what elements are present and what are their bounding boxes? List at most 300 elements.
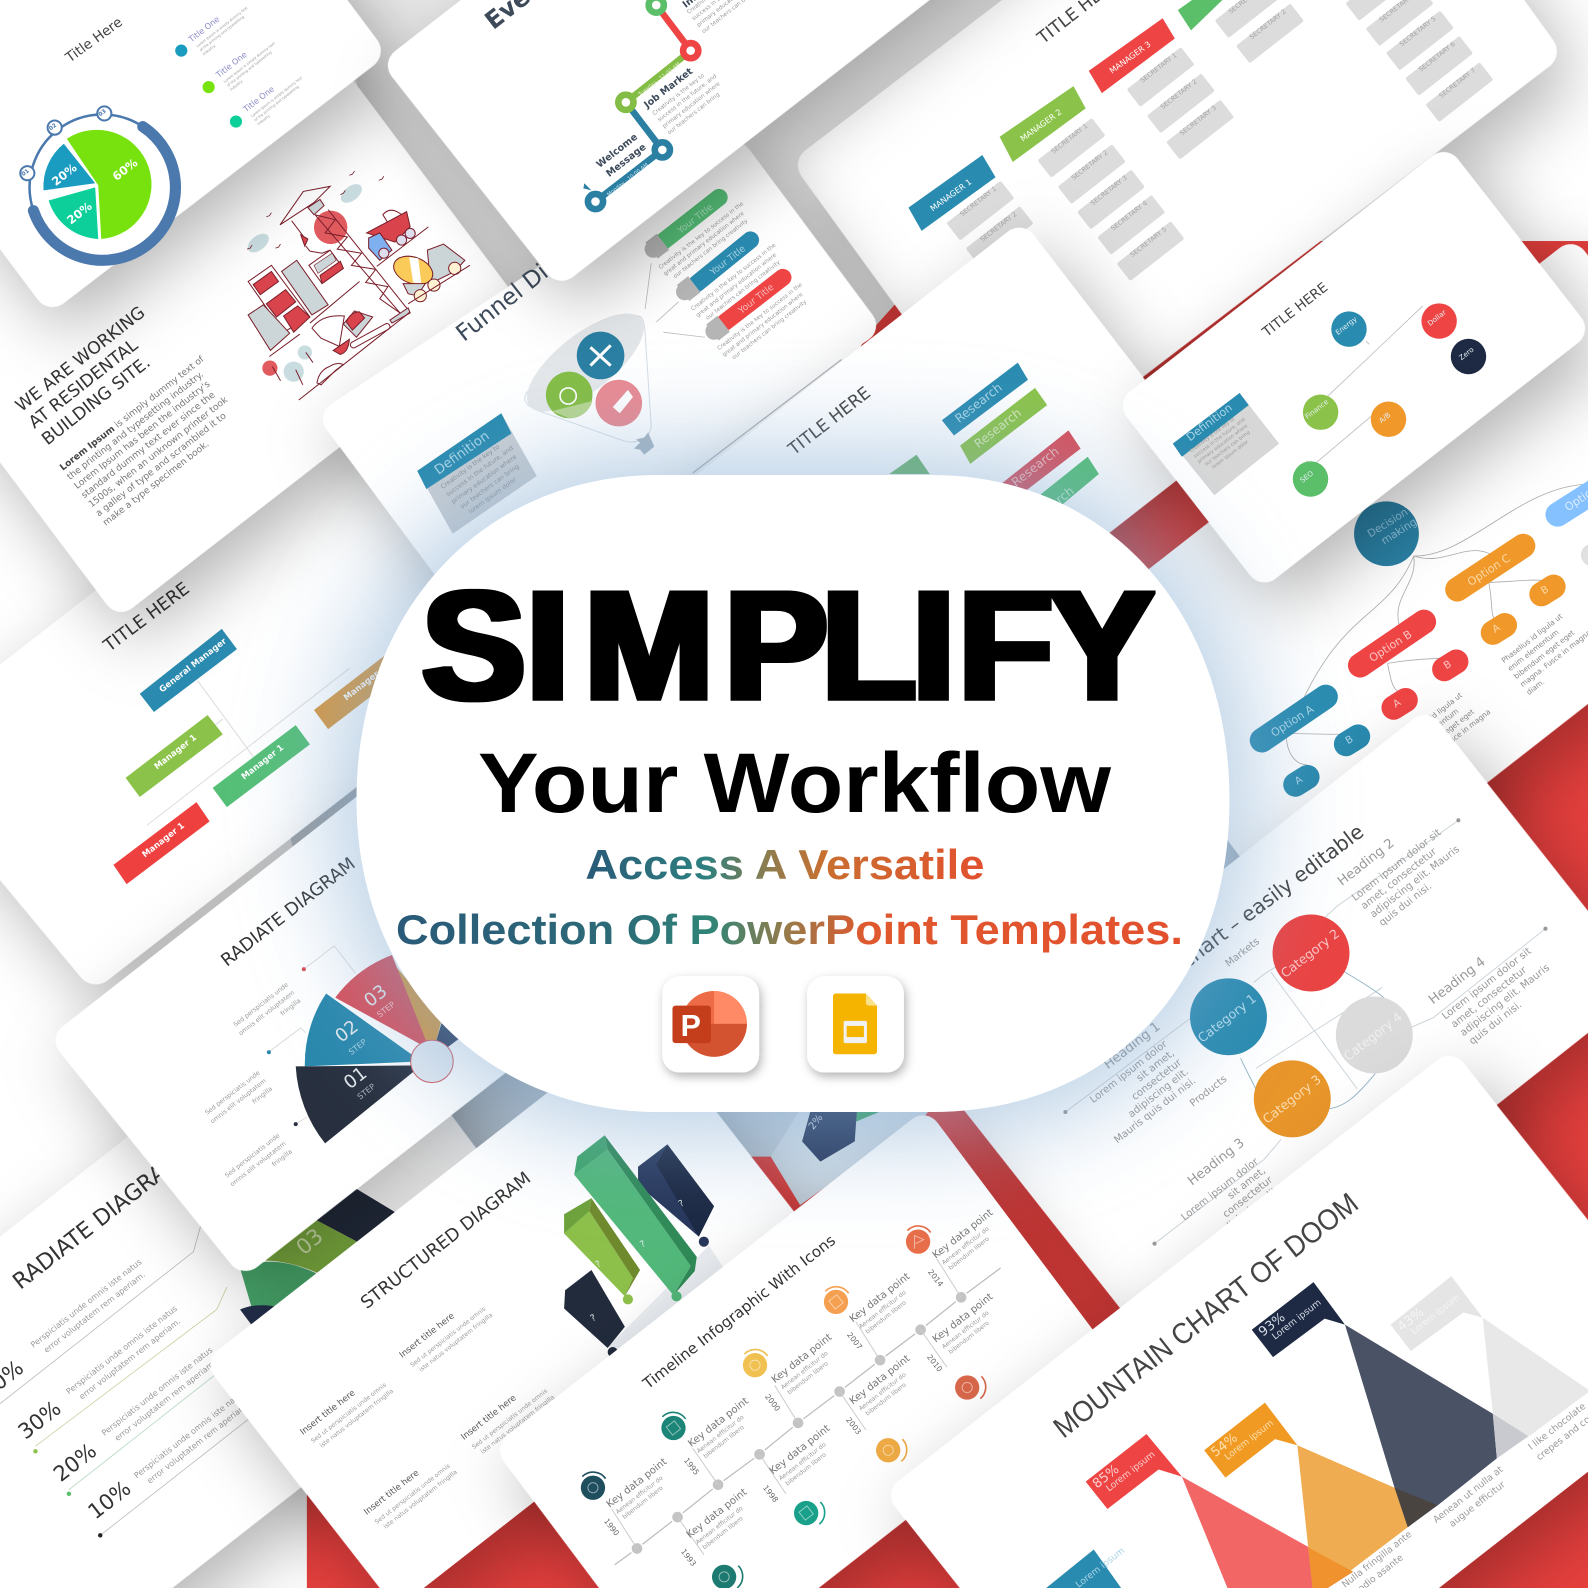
step labels: 01 (21, 168, 31, 178)
green arc chart (240, 1187, 402, 1337)
definition box: Definition (432, 429, 492, 478)
text blocks: Sed ut perspiciatis unde omnis (471, 1388, 549, 1451)
option B: A (1391, 697, 1403, 710)
legend: industry. (202, 44, 217, 56)
category 2: Category 2 (1278, 926, 1342, 981)
leader dots (267, 967, 306, 1126)
definition box (1173, 393, 1279, 495)
key data descriptions: Aenean efficitur do (858, 1371, 908, 1412)
heading bodies (1084, 825, 1559, 1251)
label 43: 43% (1395, 1305, 1427, 1335)
pill descriptions: great and primary education where (722, 292, 805, 358)
title: Timeline Infographic With Icons (639, 1231, 839, 1393)
route line (588, 0, 698, 209)
definition box: Creativity is the key to (440, 443, 501, 491)
years: 2010 (925, 1353, 944, 1374)
heading bodies: consectetur (1130, 1057, 1185, 1103)
decision circle: Decision (1365, 505, 1410, 540)
key data descriptions: bibendum libero (947, 1320, 991, 1356)
dark block (564, 1270, 625, 1357)
title: STRUCTURED DIAGRAM (357, 1169, 535, 1313)
slide: timeline with icons (493, 1108, 1114, 1588)
manager chip lime: Manager 1 (153, 733, 199, 772)
path line (615, 1268, 1001, 1565)
heading: AT RESIDENTAL (25, 335, 142, 433)
legend: of the printing and typesetting (226, 50, 272, 88)
years: 1995 (682, 1456, 701, 1477)
text blocks: Sed ut perspiciatis unde omnis (310, 1382, 388, 1445)
percentages: 60% (110, 155, 141, 184)
slide: decision making (1070, 237, 1588, 932)
years: 2007 (845, 1331, 864, 1351)
secretary labels: SECRETARY 3 (1178, 104, 1218, 137)
key data labels: Key data point (848, 1353, 912, 1407)
grey underlayer top centre (344, 0, 1013, 506)
matrix lines (1065, 820, 1545, 1244)
heading bodies: Lorem ipsum dolor (1088, 1038, 1170, 1106)
illustration: construction site (244, 171, 470, 400)
legend: industry. (257, 113, 271, 126)
pill descriptions: Creativity is the key to success in the (690, 242, 778, 312)
key data labels: Key data point (931, 1291, 995, 1345)
key data descriptions (615, 1225, 996, 1552)
end dots (1063, 818, 1547, 1246)
pill: red title: Your Title (736, 282, 776, 317)
paragraph: Lorem Ipsum has been the industry's (73, 379, 213, 492)
text blocks: Insert title here (460, 1393, 518, 1443)
secretary labels: SECRETARY 5 (1398, 15, 1438, 48)
footer captions: augue efficitur (1447, 1479, 1508, 1530)
step labels (21, 108, 108, 178)
row descriptions: Perspiciatis unde omnis iste natus (99, 1345, 214, 1438)
option text: enim elementum (1506, 627, 1560, 673)
slide: funnel diagram (316, 134, 883, 610)
icon: cement mixer (390, 244, 470, 304)
slide: radiate diagram percentages (0, 969, 572, 1588)
legend (175, 6, 310, 128)
question marks: ? (589, 1313, 598, 1324)
row descriptions (28, 1257, 254, 1490)
axis labels: Products (1188, 1074, 1229, 1109)
option C: A (1491, 622, 1502, 636)
node labels: Zero (1457, 345, 1475, 362)
step labels: 03 (98, 108, 108, 118)
headings: Heading 4 (1426, 955, 1489, 1008)
key data descriptions: bibendum libero (701, 1515, 745, 1551)
percent values: 20% (49, 1439, 102, 1487)
slide: pie chart (0, 0, 388, 314)
secretary labels: SECRETARY 6 (1417, 40, 1457, 73)
decision circle: making (1379, 515, 1419, 547)
manager chip orange: Manager 1 (342, 664, 388, 703)
subheadline: Your Workflow (478, 736, 1112, 830)
pill descriptions (658, 201, 814, 365)
icon: trees and mound (262, 345, 343, 385)
question marks: ? (639, 1239, 648, 1250)
heading bodies: amet, consectetur (1359, 846, 1440, 912)
grey blue underlayer bottom centre (405, 1013, 871, 1215)
key data descriptions: Aenean efficitur do (780, 1350, 830, 1391)
thick ring (33, 127, 175, 260)
icon: crane (280, 186, 410, 323)
key data descriptions: bibendum libero (621, 1485, 665, 1521)
stop descriptions: success in the future, and (657, 73, 719, 123)
title: Matrix chart – easily editable (1120, 819, 1368, 1015)
legend: Lorem Ipsum is simply dummy text (250, 75, 304, 118)
years (602, 1268, 945, 1568)
headline: SIMPLIFY (422, 559, 1154, 733)
row descriptions: error voluptatem rem aperiam. (77, 1316, 182, 1401)
manager 3 chip: MANAGER 3 (1107, 39, 1153, 76)
step badges (20, 106, 111, 180)
funnel slide lower fill (547, 304, 873, 527)
years: 1993 (679, 1547, 698, 1568)
option C (1457, 546, 1570, 649)
text blocks: Insert title here (398, 1311, 457, 1360)
option text: diam. (1525, 677, 1546, 697)
text blocks: Insert title here (299, 1388, 357, 1437)
row descriptions: error voluptatem rem aperiam. (145, 1400, 250, 1485)
years: 1998 (761, 1483, 780, 1504)
secretary labels: SECRETARY 4 (1109, 199, 1149, 232)
node labels: A/B (1377, 410, 1392, 425)
research green (960, 388, 1047, 464)
slide: mountain chart (884, 1049, 1588, 1588)
key data labels: Key data point (685, 1487, 749, 1541)
definition box: Creativity is the key to (1189, 416, 1236, 454)
definition box: success in the future, and (445, 445, 515, 498)
stop titles: Message (604, 141, 649, 180)
heading: WE ARE WORKING (12, 303, 149, 416)
general manager chip: General Manager (158, 636, 229, 695)
axis labels: Markets (1224, 936, 1262, 970)
option text (1399, 604, 1588, 768)
title: Title Here (62, 14, 126, 67)
heading bodies: sit amet, (1135, 1048, 1177, 1084)
label 54: Lorem ipsum (1223, 1418, 1276, 1463)
icon: tools circle (577, 332, 624, 379)
pill: blue title (676, 240, 750, 301)
option text: enim elementum (1406, 706, 1460, 752)
navy mountain (1345, 1325, 1497, 1527)
heading bodies: Lorem ipsum dolor sit (1350, 827, 1443, 904)
row descriptions: error voluptatem rem aperiam. (42, 1269, 147, 1355)
nodes (631, 1291, 967, 1555)
legend: industry. (229, 79, 244, 92)
title: RADIATE DIAGRAM (8, 1147, 187, 1295)
label 43 (1391, 1276, 1483, 1351)
option B: Option B (1367, 628, 1414, 665)
navy orange overlap (1395, 1488, 1437, 1527)
slide with cube (771, 1094, 942, 1205)
pill: green title: Your Title (675, 202, 716, 237)
label blue (1046, 1546, 1127, 1588)
node labels: Finance (1303, 397, 1330, 421)
route labels (606, 61, 682, 198)
row descriptions: Perspiciatis unde omnis iste natus (28, 1257, 144, 1350)
mountains (1182, 1318, 1588, 1588)
step text (203, 981, 302, 1196)
title: TITLE HERE (784, 383, 875, 460)
slide: structured diagram (203, 1018, 836, 1588)
gray mountain (1483, 1318, 1588, 1458)
heading bodies: quis dui nisi. (1377, 881, 1434, 929)
heading bodies: adipiscing elit. Mauris (1458, 962, 1552, 1039)
step text: Sed perspiciatis unde (232, 981, 290, 1029)
key data labels: Key data point (848, 1271, 912, 1325)
stop titles: Job Market (641, 66, 695, 111)
row descriptions: Perspiciatis unde omnis iste natus (64, 1303, 179, 1396)
step labels (331, 981, 397, 1101)
red mountain (1182, 1477, 1353, 1588)
step labels: 01 (340, 1063, 371, 1094)
connectors (1286, 484, 1588, 765)
icon: target circle (546, 372, 592, 418)
step text: fringilla (251, 1085, 274, 1106)
option text: bibendum eget eget (1412, 707, 1476, 760)
heading bodies: amet, consectetur (1449, 964, 1530, 1031)
percent values: 30% (14, 1396, 66, 1445)
stop descriptions: our teachers can bring (667, 92, 721, 136)
pill descriptions: our teachers can bring creativity (673, 218, 750, 280)
icon: PowerPoint: P (681, 1009, 701, 1043)
heading bodies: sit amet, (1226, 1166, 1268, 1202)
icon: excavator (299, 282, 410, 400)
green bar (574, 1135, 697, 1301)
secretary labels: SECRETARY 1 (1139, 51, 1178, 85)
category 4: Category 4 (1341, 1009, 1405, 1064)
paragraph: Lorem Ipsum is simply dummy text of (58, 355, 206, 473)
icon arcs (582, 1226, 986, 1588)
key data descriptions: bibendum libero (786, 1360, 830, 1396)
category 1: Category 1 (1195, 991, 1259, 1046)
label 93 (1252, 1282, 1345, 1357)
key data descriptions: bibendum libero (702, 1424, 746, 1460)
secretary labels (958, 0, 1477, 259)
key data descriptions: Aenean efficitur do (615, 1474, 665, 1516)
key data descriptions: Aenean efficitur do (941, 1309, 991, 1351)
headings: Heading 1 (1101, 1019, 1163, 1073)
step labels: 02 (331, 1016, 363, 1047)
red orange overlap (1308, 1547, 1353, 1588)
pill descriptions: great and primary education where (695, 252, 778, 319)
node labels (1298, 308, 1475, 485)
step text: fringilla (271, 1148, 294, 1168)
text blocks: Insert title here (362, 1468, 421, 1517)
definition box: Definition (1184, 401, 1235, 444)
stop titles (595, 0, 728, 181)
percentages: 20% (64, 199, 95, 227)
label 93: Lorem ipsum (1271, 1298, 1324, 1342)
slide: residential building site (0, 0, 522, 619)
definition box: lorem ipsum dolor (1211, 439, 1250, 470)
text blocks: Sed ut perspiciatis unde omnis (374, 1463, 452, 1526)
definition box: our teachers can bring (1204, 430, 1251, 468)
title: Funnel Diagram (451, 212, 613, 347)
heading bodies: consectetur (1221, 1174, 1276, 1220)
research red (1000, 430, 1081, 502)
paragraph: a galley of type and scrambled it to (94, 411, 229, 519)
pill descriptions: our teachers can bring creativity (731, 299, 808, 361)
green arc chart: 03 (292, 1224, 328, 1260)
pill descriptions: our teachers can bring creativity (705, 259, 782, 322)
secretary labels: SECRETARY 3 (1089, 174, 1129, 207)
manager chip red: Manager 1 (141, 821, 187, 860)
secretary labels: SECRETARY 7 (1437, 66, 1477, 100)
icon: PowerPoint (662, 976, 759, 1073)
stop descriptions: primary education where (662, 81, 722, 130)
connector arrows (645, 263, 705, 337)
top edge line (693, 360, 842, 473)
years: 2014 (926, 1268, 945, 1289)
pill descriptions: Creativity is the key to success in the (658, 201, 745, 271)
stop titles: Welcome (595, 131, 640, 170)
question marks (589, 1199, 686, 1324)
option A: Option A (1269, 702, 1316, 740)
manager chip green (213, 725, 310, 807)
question marks: ? (594, 1259, 603, 1271)
percent values (0, 1356, 136, 1525)
navy gray overlap (1493, 1414, 1528, 1458)
step labels: STEP (375, 999, 397, 1019)
label 54 (1204, 1403, 1297, 1478)
option A: A (1293, 774, 1305, 787)
heading bodies: quis dui nisi. (1468, 999, 1524, 1047)
pill: green title (645, 197, 719, 258)
secretary labels: SECRETARY 2 (1248, 8, 1288, 41)
red backdrop (307, 241, 1588, 1588)
key data descriptions: bibendum libero (784, 1451, 828, 1487)
3d blocks (564, 1135, 729, 1357)
step text: omnis elit voluptatem (229, 1140, 287, 1188)
step text: omnis elit voluptatem (209, 1078, 268, 1125)
key data labels: Key data point (605, 1457, 669, 1510)
footer captions (1340, 1393, 1588, 1588)
years: 1990 (602, 1517, 621, 1538)
manager chip red (113, 802, 210, 884)
label 85 (1086, 1434, 1182, 1509)
headings: Heading 3 (1185, 1136, 1248, 1189)
manager 1 chip (908, 155, 996, 231)
heading: BUILDING SITE. (38, 353, 154, 450)
option A: B (1344, 734, 1356, 747)
axis labels (1188, 936, 1262, 1109)
leader lines (268, 946, 355, 1124)
icon: buildings (248, 260, 328, 356)
key data labels: Key data point (931, 1207, 995, 1261)
slide: research chips (606, 220, 1205, 783)
tree lines (1306, 306, 1423, 466)
option text: magna. Fusce in magna (1418, 707, 1492, 768)
heading bodies: Lorem ipsum dolor (1179, 1156, 1261, 1223)
manager chip lime (126, 715, 223, 797)
green partial chip (889, 455, 930, 474)
legend: of the printing and typesetting (199, 15, 245, 52)
text blocks: iste natus voluptatem fringilla (418, 1312, 494, 1373)
manager 3 chip (1089, 18, 1175, 93)
option C: B (1539, 584, 1551, 597)
legend: Title One (186, 14, 221, 45)
footer captions: I like chocolate (1526, 1401, 1588, 1453)
icon: Google Slides (807, 976, 904, 1073)
manager 1 chip: MANAGER 1 (928, 177, 973, 213)
definition box: primary education where (450, 453, 518, 506)
step text: omnis elit voluptatem (238, 989, 296, 1037)
text blocks: iste natus voluptatem fringilla (480, 1394, 556, 1456)
stop descriptions: Creativity is the key to (652, 73, 706, 117)
heading bodies: adipiscing elit. (1126, 1066, 1191, 1120)
category 3 (1254, 1060, 1331, 1137)
title: RADIATE DIAGRAM (218, 854, 359, 971)
manager chip green: Manager 1 (240, 743, 286, 782)
key data descriptions: Aenean efficitur do (858, 1289, 908, 1330)
definition box (417, 413, 537, 534)
manager 2 chip: MANAGER 2 (1018, 107, 1063, 143)
manager 4 chip (1178, 0, 1222, 30)
pill: red title (705, 277, 783, 340)
percentages: 20% (49, 160, 80, 189)
research green 2: Research (1024, 484, 1077, 529)
definition box: lorem ipsum dolor (468, 476, 518, 516)
key data labels (605, 1207, 995, 1541)
secretary labels: SECRETARY 2 (979, 210, 1018, 244)
research blue: Research (952, 380, 1005, 426)
label 43: Lorem ipsum (1409, 1293, 1462, 1337)
category 3: Category 3 (1260, 1072, 1324, 1127)
legend: Title One (240, 84, 276, 115)
title: MOUNTAIN CHART OF DOOM (1047, 1187, 1365, 1445)
blue slice 20 (43, 144, 95, 190)
title: TITLE HERE (1259, 280, 1331, 341)
connector lines (0, 1226, 250, 1535)
slide: radiate diagram steps (48, 697, 678, 1278)
slide with cube: 2% (807, 1112, 826, 1132)
tagline line 1: Access A Versatile (585, 841, 984, 888)
research blue (942, 363, 1028, 435)
option text: Phaselius id ligula ut (1500, 612, 1564, 665)
grey underlayer left band (284, 709, 435, 891)
label 85: 85% (1090, 1462, 1122, 1492)
slide: matrix chart (947, 708, 1588, 1366)
research red: Research (1009, 444, 1062, 489)
thin ring (30, 114, 143, 211)
row descriptions: Perspiciatis unde omnis iste natus (132, 1387, 247, 1480)
navy block (638, 1144, 714, 1247)
row dots (33, 1449, 102, 1538)
secretary labels: SECRETARY 5 (1129, 225, 1168, 259)
percentages (49, 155, 141, 227)
block shadows (608, 1246, 729, 1357)
secretaries (946, 0, 1493, 281)
step labels: STEP (347, 1037, 369, 1057)
manager chip orange (314, 646, 411, 729)
step text: Sed perspiciatis unde (204, 1069, 262, 1117)
icon: birds (247, 171, 384, 249)
key data descriptions: bibendum libero (947, 1235, 991, 1272)
blue glow around blob (356, 475, 1229, 1112)
secretary labels: SECRETARY 1 (958, 185, 998, 218)
legend: of the printing and typesetting (253, 85, 300, 122)
tagline line 2: Collection Of PowerPoint Templates. (396, 906, 1183, 953)
icon: dump truck (367, 210, 428, 266)
option A (1262, 697, 1375, 801)
research green: Research (972, 406, 1024, 451)
icon: horn circle (596, 380, 642, 426)
option text: Phaselius id ligula ut (1399, 691, 1464, 744)
icon: down arrow (634, 432, 654, 455)
question marks: ? (677, 1199, 686, 1210)
definition box: primary education where (1197, 423, 1249, 465)
